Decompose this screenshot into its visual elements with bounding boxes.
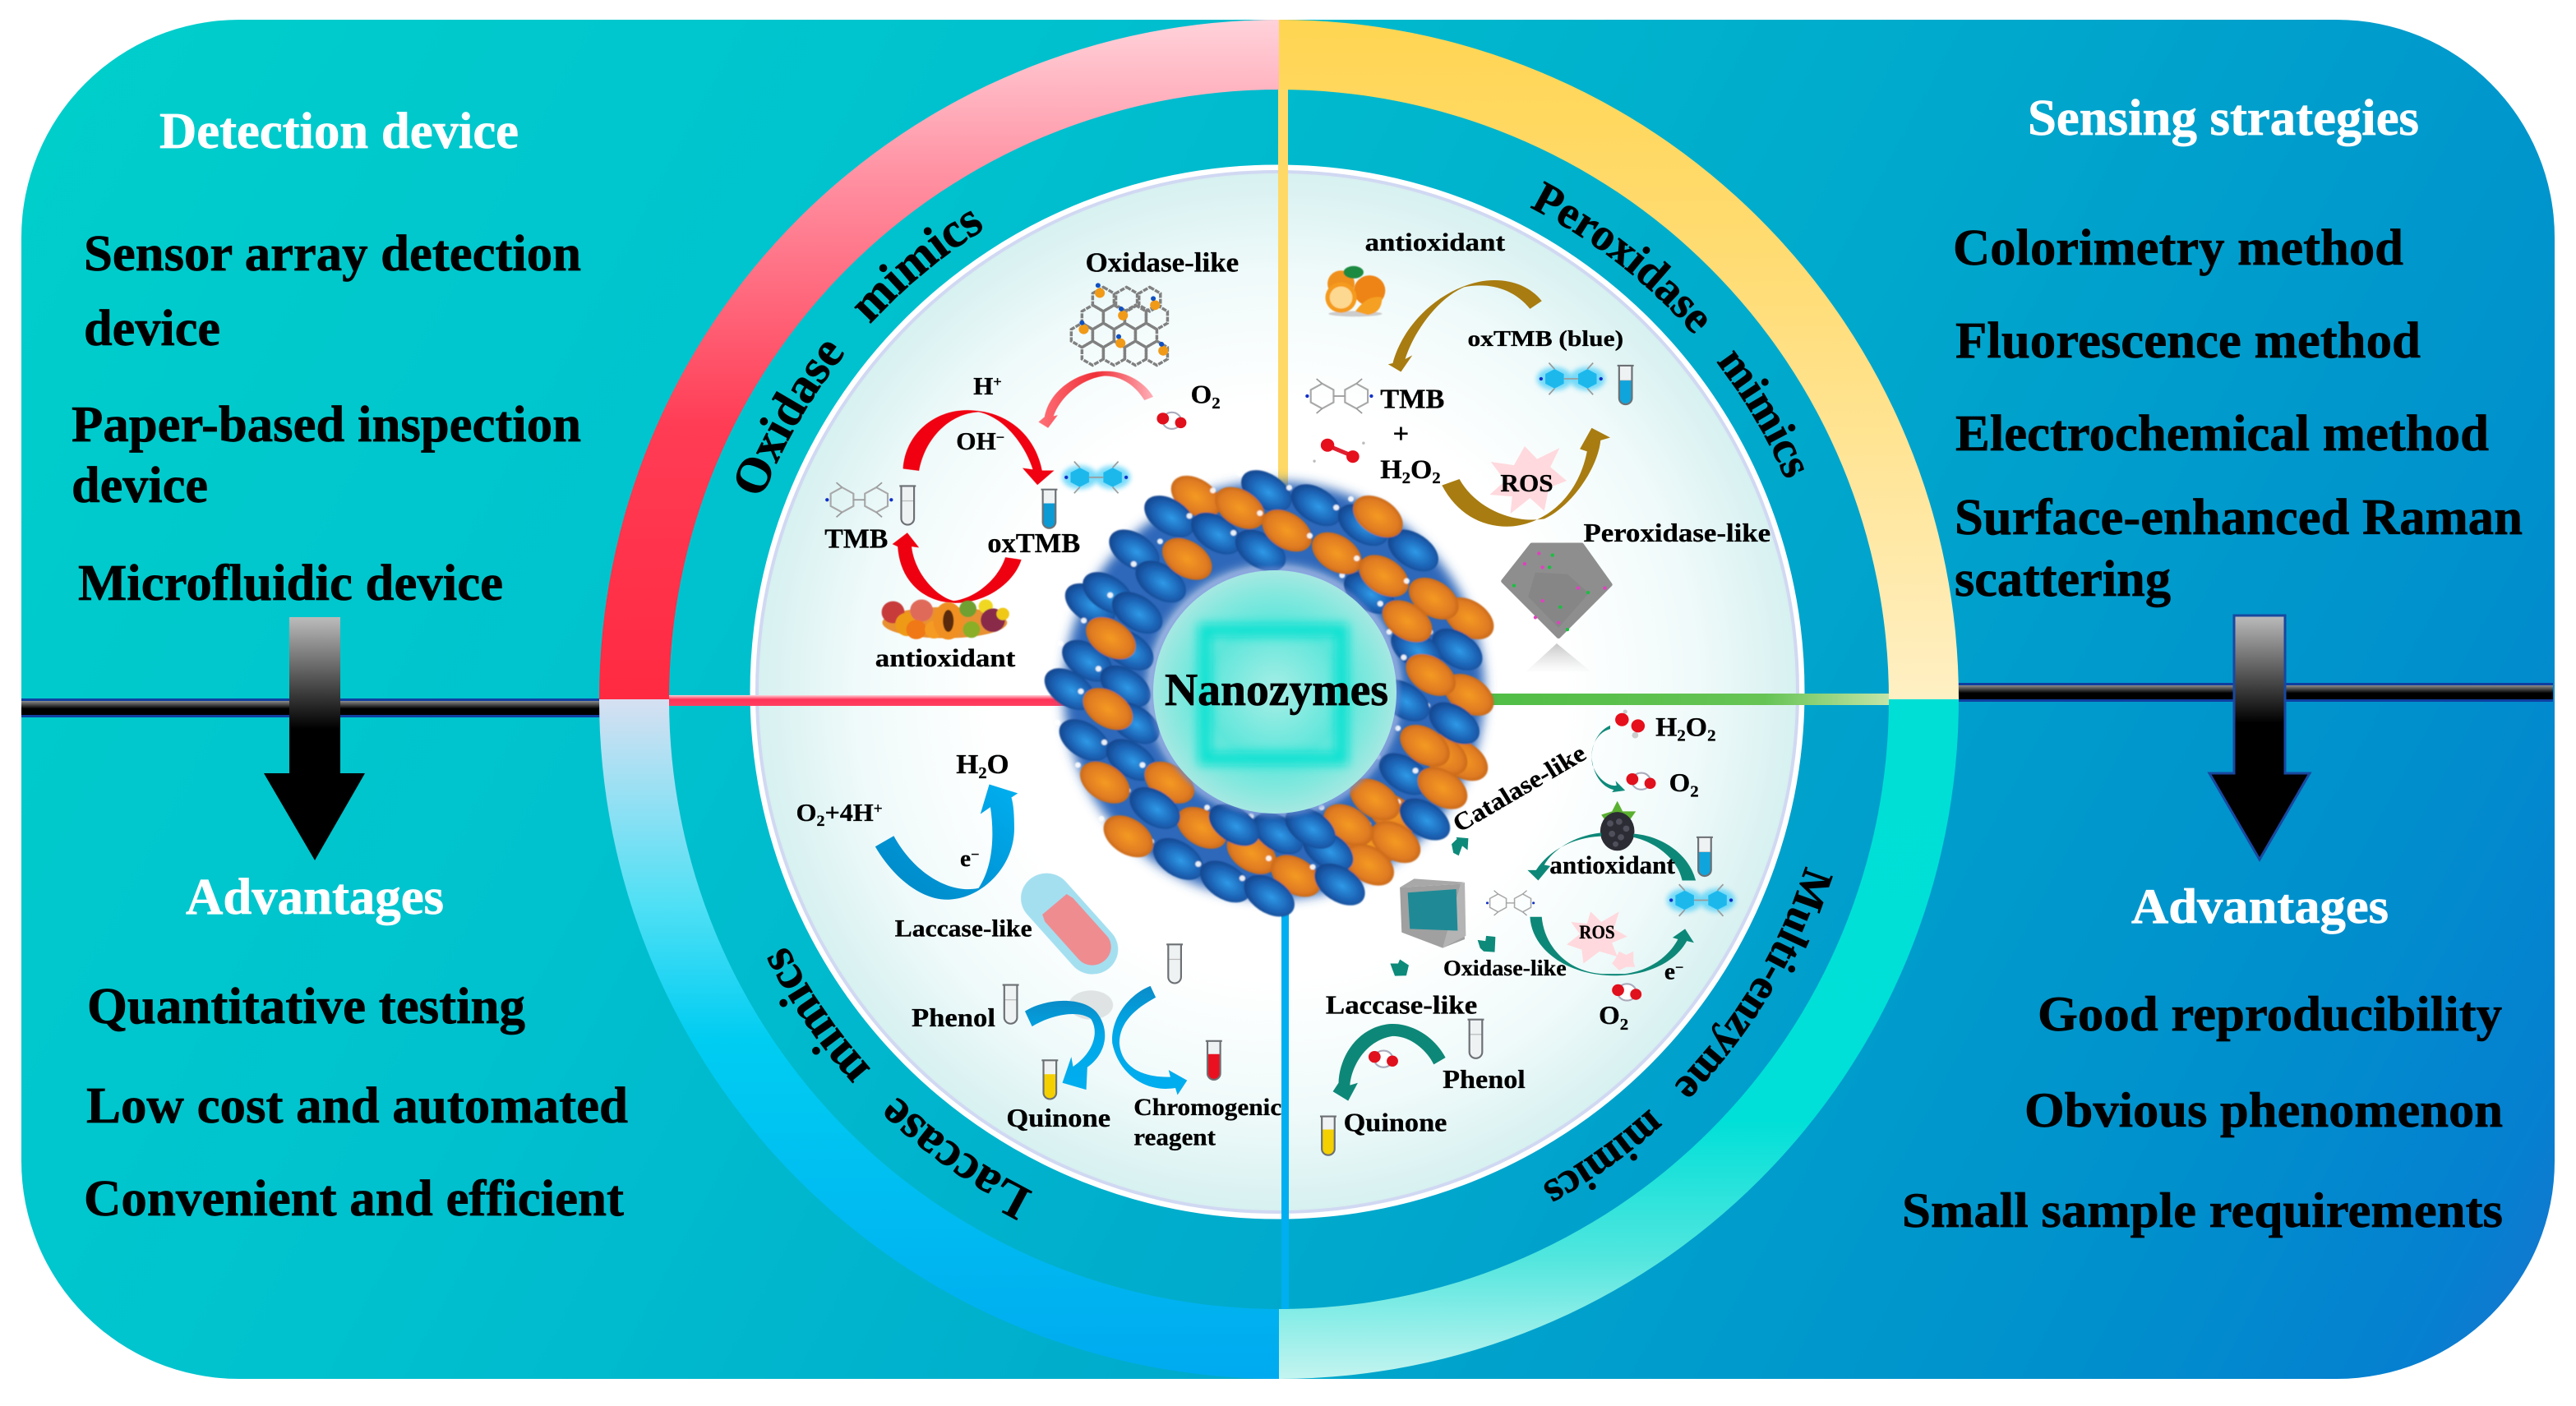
label: O2+4H+: +4H bbox=[824, 799, 874, 827]
label: O2+4H+: + bbox=[874, 800, 883, 818]
icon: red tube bbox=[1206, 1040, 1222, 1080]
label: oxTMB: oxTMB bbox=[987, 529, 1080, 559]
label: H2O: O bbox=[987, 749, 1009, 780]
list: right advantages bbox=[1902, 987, 2503, 1238]
arrow: antioxidant reduction bbox=[1388, 280, 1542, 372]
label: O2: O bbox=[1599, 1002, 1620, 1030]
icon: oranges bbox=[1325, 266, 1385, 316]
icon: cube nanozyme bbox=[1400, 878, 1466, 948]
label: H2O2: H bbox=[1655, 712, 1677, 742]
heading: Sensing strategies: Sensing strategies bbox=[2028, 90, 2419, 146]
list: sensing strategies: Electrochemical method bbox=[1955, 406, 2489, 462]
heading: right advantages: Advantages bbox=[2131, 879, 2389, 933]
icon: empty tube bbox=[899, 486, 916, 525]
heading: left advantages: Advantages bbox=[186, 869, 444, 925]
label: Quinone: Quinone bbox=[1006, 1104, 1110, 1133]
icon: oxygen molecule bbox=[1627, 773, 1656, 790]
list: sensing strategies: Fluorescence method bbox=[1955, 313, 2421, 369]
label: Quinone: Quinone bbox=[1344, 1109, 1447, 1138]
icon: oxTMB molecule bbox=[1667, 884, 1735, 916]
label: H2O2: H bbox=[1380, 455, 1402, 485]
icon: reagent tube bbox=[1166, 944, 1183, 984]
axis lines bbox=[669, 90, 1889, 1309]
label: Laccase-like: Laccase-like bbox=[1326, 991, 1477, 1020]
list: detection devices bbox=[72, 226, 581, 611]
icon: capsule bbox=[1010, 863, 1129, 984]
label: Chromogenic reagent: reagent bbox=[1133, 1124, 1216, 1150]
central disc bbox=[754, 168, 1801, 1215]
panel: laccase quadrant bbox=[796, 749, 1281, 1150]
list: right advantages: Small sample requirements bbox=[1902, 1183, 2503, 1238]
label: oxTMB (blue): oxTMB (blue) bbox=[1468, 326, 1623, 352]
arrow: laccase cycle bbox=[1333, 1024, 1446, 1101]
arrow: to laccase bbox=[1390, 959, 1409, 976]
label: OH-: − bbox=[996, 429, 1004, 445]
white glow around nanozyme ring bbox=[1004, 421, 1546, 963]
label: Peroxidase-like: Peroxidase-like bbox=[1583, 519, 1770, 548]
list: detection devices: device bbox=[84, 301, 220, 357]
ring quadrant: peroxidase bbox=[1279, 20, 1959, 699]
list: detection devices: device bbox=[72, 458, 208, 514]
list: sensing strategies: Colorimetry method bbox=[1953, 220, 2403, 276]
icon: TMB molecule bbox=[1486, 891, 1535, 915]
label: e-: e bbox=[960, 846, 971, 872]
label: Catalase-like: Catalase-like bbox=[1447, 740, 1590, 837]
icon: yellow tube bbox=[1320, 1116, 1336, 1155]
arrow: phenol to quinone bbox=[1025, 1001, 1105, 1090]
ring quadrant: multi-enzyme bbox=[1279, 699, 1959, 1379]
icon: TMB molecule bbox=[1305, 379, 1373, 413]
icon: oxygen molecule bbox=[1369, 1051, 1398, 1067]
icon: hydrogen peroxide molecule bbox=[1615, 710, 1645, 739]
ring label: Oxidase mimics: Oxidase mimics bbox=[736, 210, 982, 493]
arrow: oxidation bbox=[1530, 917, 1694, 975]
divider line left bbox=[21, 698, 600, 717]
list: right advantages: Obvious phenomenon bbox=[2024, 1083, 2503, 1137]
icon: ROS burst bbox=[1567, 911, 1635, 970]
label: O2: 2 bbox=[1620, 1016, 1628, 1034]
icon: capsule shadow bbox=[1069, 990, 1113, 1020]
label: ROS: ROS bbox=[1500, 469, 1553, 497]
arrow: oxTMB to TMB bbox=[893, 532, 1022, 603]
panel: peroxidase quadrant bbox=[1305, 229, 1770, 673]
icon: peroxidase nanoparticle bbox=[1503, 545, 1610, 637]
list: left advantages: Convenient and efficient bbox=[84, 1171, 624, 1227]
label: O2: 2 bbox=[1690, 783, 1699, 801]
icon: fruit pile bbox=[882, 599, 1009, 639]
label: e-: − bbox=[1675, 959, 1683, 975]
arrow: to catalase bbox=[1452, 837, 1468, 855]
arrow: to oxidase bbox=[1478, 936, 1495, 952]
panel: oxidase quadrant bbox=[824, 248, 1239, 672]
ring quadrant: oxidase bbox=[599, 20, 1279, 699]
arrow left bbox=[264, 617, 365, 860]
icon: oxygen molecule bbox=[1612, 984, 1641, 1001]
label: H2O2: O bbox=[1686, 712, 1707, 742]
label: plus: + bbox=[1392, 419, 1409, 449]
label: Laccase-like: Laccase-like bbox=[895, 915, 1032, 943]
label: H2O2: 2 bbox=[1707, 727, 1716, 744]
arrow right bbox=[2209, 615, 2310, 860]
label: Phenol: Phenol bbox=[912, 1004, 995, 1033]
list: sensing strategies: Surface-enhanced Raman bbox=[1955, 490, 2523, 546]
central label: Nanozymes bbox=[1165, 665, 1388, 716]
label: ROS: ROS bbox=[1579, 923, 1615, 943]
arrow: oxygen reduction bbox=[875, 784, 1018, 900]
icon: yellow tube bbox=[1041, 1060, 1058, 1099]
label: H2O2: 2 bbox=[1432, 469, 1441, 487]
arrow: TMB to oxTMB bbox=[903, 410, 1055, 485]
label: H+: + bbox=[993, 374, 1002, 390]
label: antioxidant: antioxidant bbox=[875, 645, 1016, 672]
list: left advantages: Low cost and automated bbox=[86, 1078, 628, 1134]
ring label: Multi-enzyme mimics: Multi-enzyme mimics bbox=[1544, 866, 1833, 1201]
label: H+: H bbox=[973, 372, 993, 400]
label: Oxidase-like: Oxidase-like bbox=[1443, 957, 1567, 981]
list: right advantages: Good reproducibility bbox=[2038, 987, 2502, 1041]
icon: phenol tube bbox=[1003, 984, 1019, 1024]
icon: TMB molecule bbox=[825, 482, 893, 517]
list: sensing strategies: scattering bbox=[1955, 551, 2171, 607]
icon: phenol tube bbox=[1468, 1019, 1484, 1058]
label: O2: O bbox=[1191, 380, 1212, 409]
divider line right bbox=[1958, 683, 2553, 702]
ring label: Laccase mimics: Laccase mimics bbox=[767, 948, 1032, 1221]
nanozyme particle ring bbox=[1036, 462, 1502, 925]
label: e-: e bbox=[1664, 959, 1675, 984]
label: antioxidant: antioxidant bbox=[1365, 229, 1506, 256]
icon: ROS burst bbox=[1489, 446, 1567, 514]
label: H2O2: 2 bbox=[1402, 469, 1410, 487]
label: OH-: OH bbox=[956, 428, 996, 455]
label: Chromogenic reagent bbox=[1133, 1094, 1281, 1150]
icon: oxTMB molecule bbox=[1537, 363, 1605, 394]
ring quadrant: laccase bbox=[599, 699, 1279, 1379]
arrow: antioxidant right segment bbox=[1633, 834, 1696, 880]
label: antioxidant: antioxidant bbox=[1549, 851, 1676, 879]
icon: hydrogen peroxide molecule bbox=[1313, 439, 1365, 463]
icon: blue tube bbox=[1041, 489, 1057, 528]
list: detection devices: Sensor array detection bbox=[84, 226, 581, 282]
label: O2+4H+: O bbox=[796, 799, 816, 827]
panel: multi-enzyme quadrant bbox=[1320, 710, 1735, 1155]
label: H2O2: O bbox=[1410, 455, 1432, 485]
list: detection devices: Paper-based inspection bbox=[72, 397, 581, 453]
icon: nanoparticle reflection bbox=[1525, 643, 1592, 673]
ring label: Peroxidase mimics: Peroxidase mimics bbox=[1530, 181, 1804, 478]
label: H2O: 2 bbox=[978, 764, 987, 782]
label: TMB: TMB bbox=[824, 524, 888, 554]
arrow: catalase cycle bbox=[1591, 726, 1625, 792]
list: detection devices: Microfluidic device bbox=[78, 555, 503, 611]
nanozyme core bbox=[1150, 567, 1400, 817]
arrow: antioxidant left segment bbox=[1527, 832, 1601, 880]
icon: oxTMB molecule bbox=[1062, 462, 1130, 493]
list: sensing strategies bbox=[1953, 220, 2523, 607]
label: Oxidase-like: Oxidase-like bbox=[1086, 248, 1239, 278]
icon: blue tube bbox=[1697, 837, 1713, 876]
label: e-: − bbox=[971, 846, 980, 862]
label: Phenol: Phenol bbox=[1443, 1065, 1526, 1095]
label: Chromogenic reagent: Chromogenic bbox=[1133, 1094, 1281, 1121]
label: O2: O bbox=[1669, 768, 1690, 798]
heading: Detection device: Detection device bbox=[159, 104, 519, 159]
label: TMB: TMB bbox=[1380, 385, 1444, 415]
label: H2O2: 2 bbox=[1677, 727, 1686, 744]
arrow: oxidation bbox=[1442, 428, 1610, 527]
icon: oxygen molecule bbox=[1156, 413, 1186, 429]
label: H2O: H bbox=[956, 749, 978, 780]
icon: blackberry bbox=[1600, 801, 1636, 851]
label: O2+4H+: 2 bbox=[816, 812, 824, 830]
icon: blue tube bbox=[1618, 365, 1634, 404]
list: left advantages: Quantitative testing bbox=[87, 979, 525, 1035]
arrow: oxygen input bbox=[1038, 371, 1153, 428]
list: left advantages bbox=[84, 979, 628, 1227]
icon: graphene sheet bbox=[1071, 283, 1168, 366]
arrow: reagent crossing bbox=[1112, 986, 1187, 1095]
label: O2: 2 bbox=[1212, 394, 1221, 413]
